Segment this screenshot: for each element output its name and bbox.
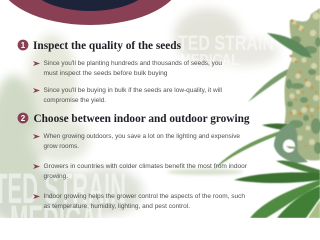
bullet 1.1 <box>33 60 223 77</box>
heading 1: Inspect the quality of the seeds <box>33 38 181 52</box>
bullet 2.1: grow rooms. <box>44 143 79 150</box>
bullet 2.2 <box>33 163 247 180</box>
short dark leaf <box>262 124 292 130</box>
watermark text: MEDICAL <box>180 52 239 69</box>
bullet 2.1 <box>33 133 241 150</box>
stem hole <box>283 140 295 152</box>
fan leaf mid <box>276 161 320 175</box>
cannabis plant illustration <box>213 8 320 218</box>
heading 2: Choose between indoor and outdoor growing <box>34 111 250 125</box>
section 1 <box>18 38 223 104</box>
bud shading <box>286 36 320 154</box>
number badge 2 <box>18 113 28 123</box>
number badge 1 <box>18 40 28 50</box>
watermark text: TED STRAIN <box>178 31 274 54</box>
number badge 2: 2 <box>21 114 26 123</box>
bullet 2.3 <box>33 193 246 210</box>
bullet 2.2: Growers in countries with colder climates benefit the most from indoor <box>44 163 247 170</box>
long thin leaf upper <box>248 68 293 102</box>
bullet 1.2 <box>33 87 222 104</box>
pale lower corner <box>308 200 320 218</box>
fan leaf long <box>234 172 320 183</box>
long thin leaf lower <box>213 128 291 170</box>
bullet 1.2: Since you'll be buying in bulk if the seeds are low-quality, it will <box>44 87 222 94</box>
number badge 1: 1 <box>21 41 26 50</box>
bud mass <box>284 8 320 160</box>
bullet 2.2: growing. <box>44 173 68 180</box>
curl with hole <box>274 123 308 163</box>
bullet 2.3: Indoor growing helps the grower control the aspects of the room, such <box>44 193 246 200</box>
fan leaf wide <box>250 180 320 218</box>
bullet 2.3: as temperature, humidity, lighting, and pest control. <box>44 203 190 210</box>
bud highlights <box>289 12 320 145</box>
bullet 1.1: must inspect the seeds before bulk buying <box>44 70 168 77</box>
watermark text <box>0 31 274 240</box>
bullet 1.2: compromise the yield. <box>44 97 106 104</box>
header arc: maroon band with navy centre <box>0 0 182 25</box>
bullet 1.1: Since you'll be planting hundreds and thousands of seeds, you <box>44 60 223 67</box>
bullet 2.1: When growing outdoors, you save a lot on the lighting and expensive <box>44 133 241 140</box>
thin leaf top left <box>267 33 312 58</box>
fan leaf right <box>277 186 320 218</box>
section 2 <box>18 111 249 210</box>
